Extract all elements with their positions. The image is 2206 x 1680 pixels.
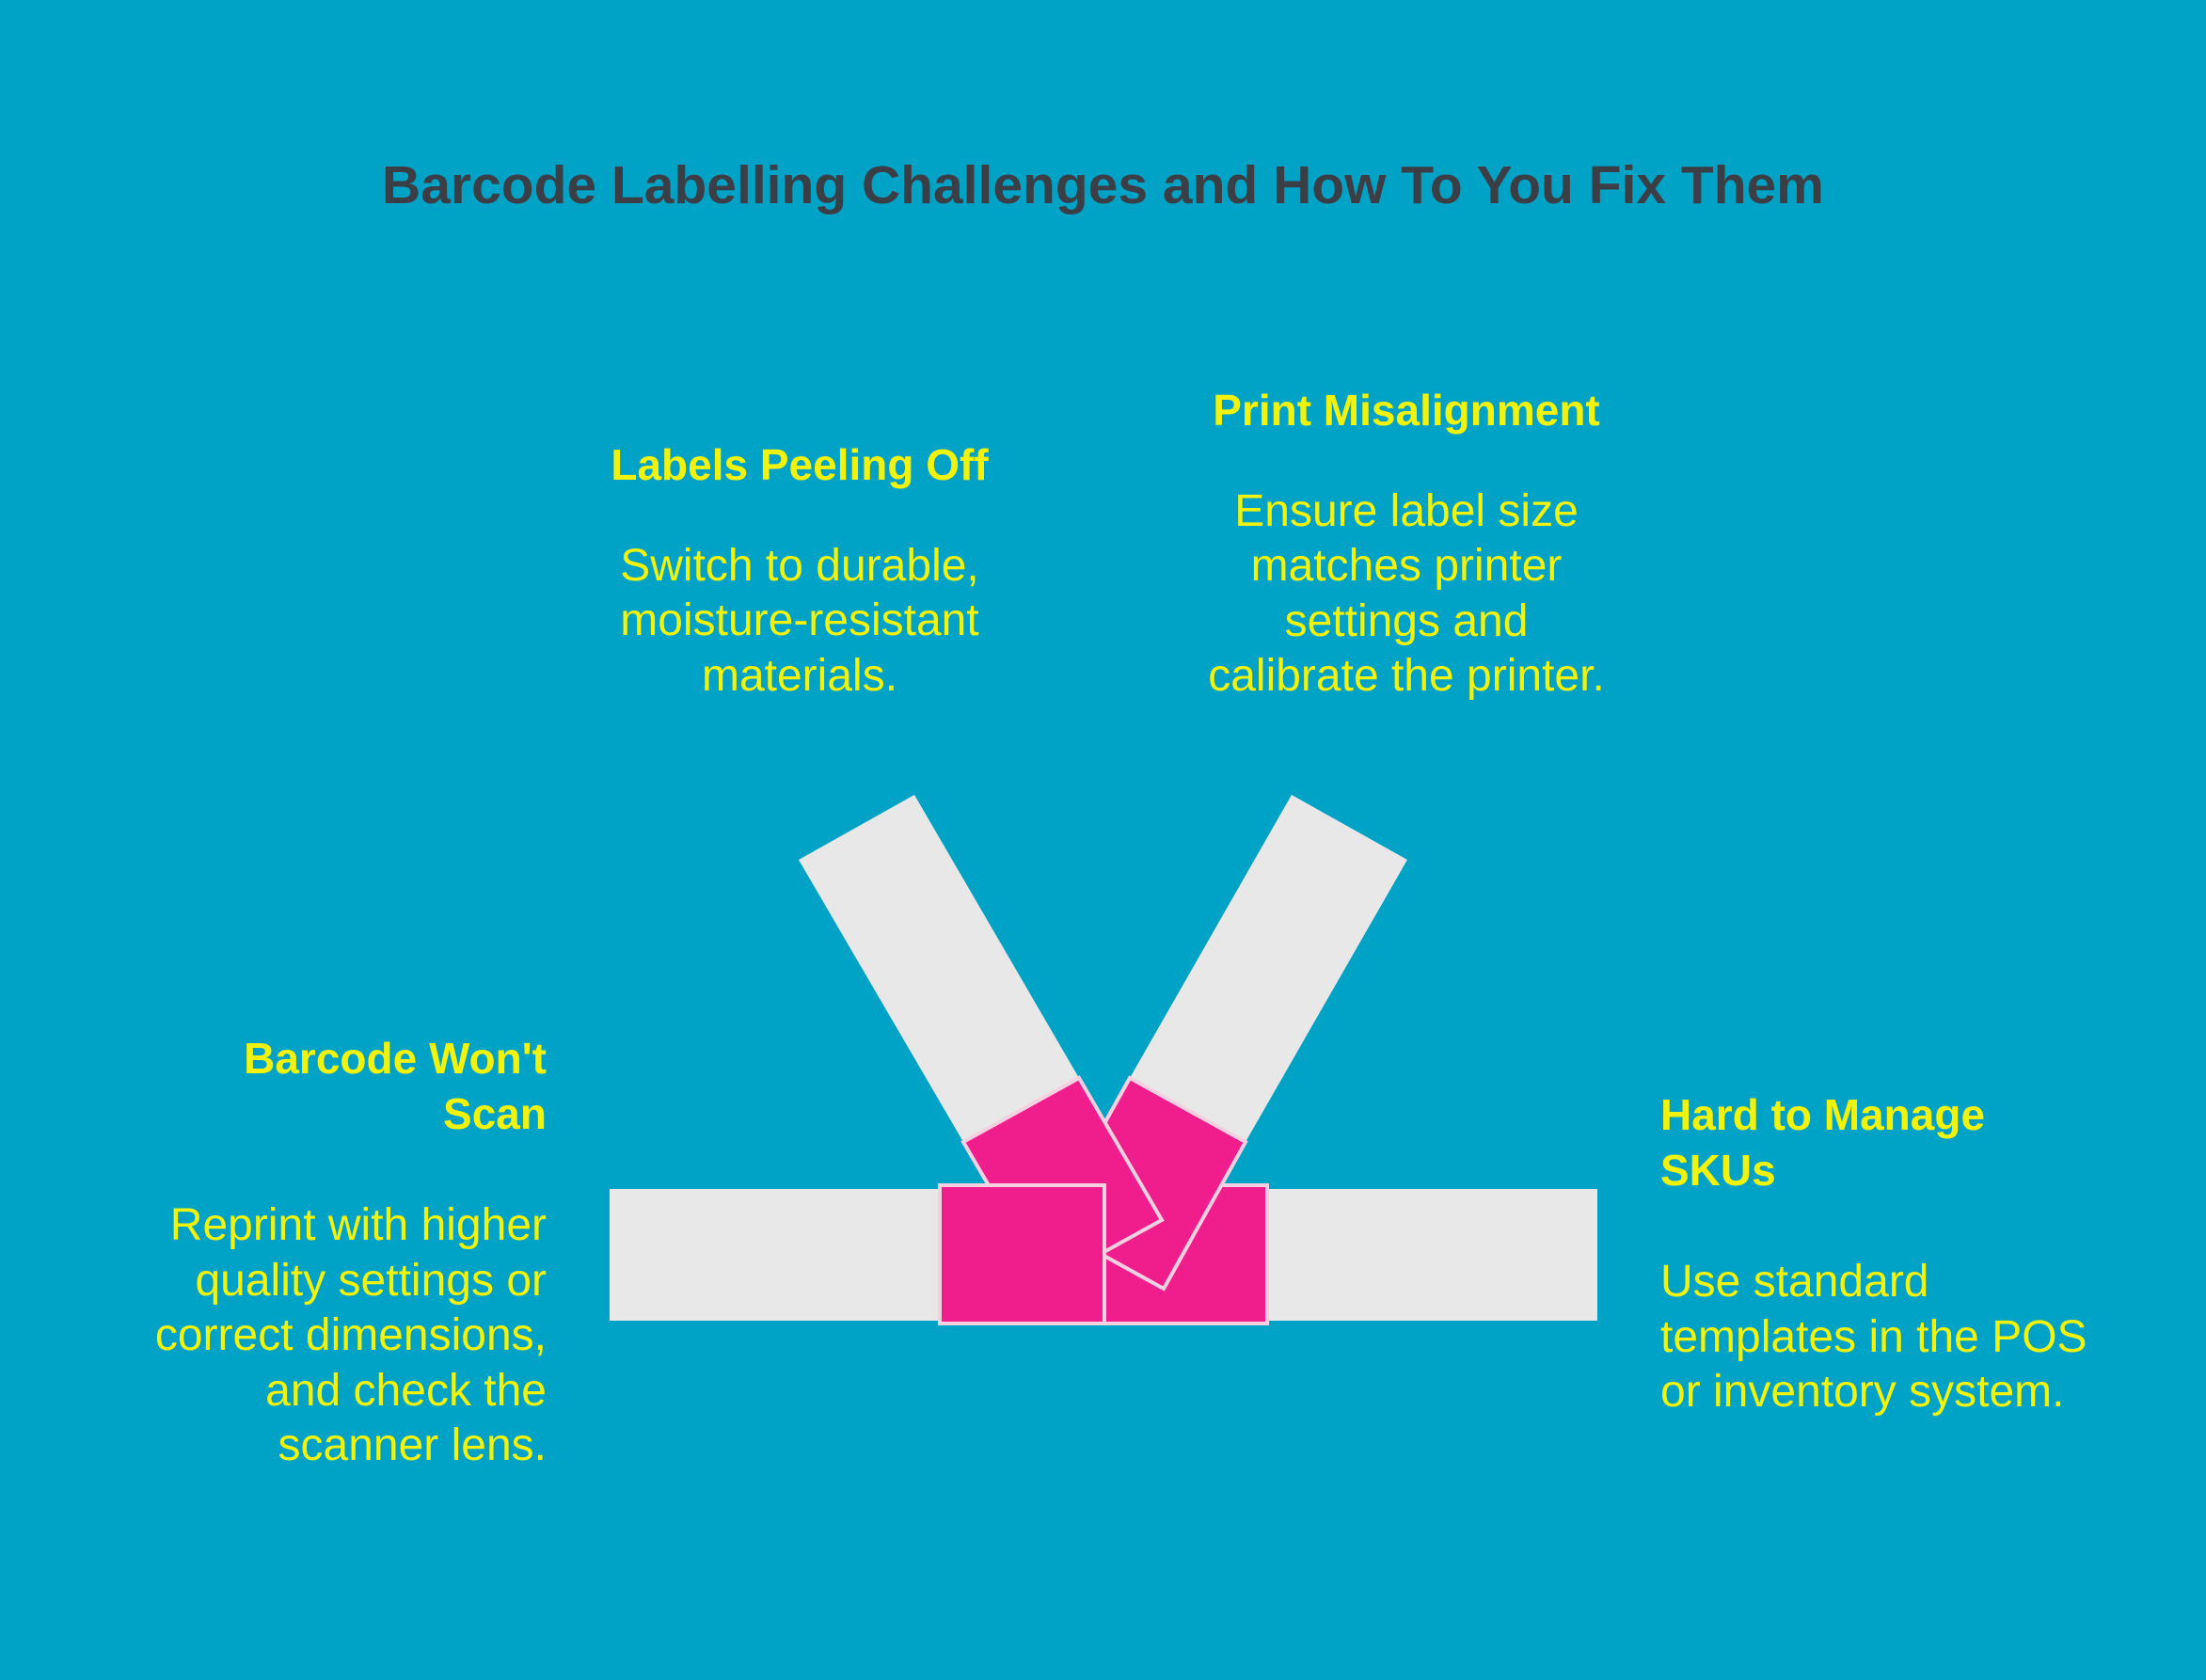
text: Barcode Won't Scan: Scan <box>443 1089 547 1138</box>
left pink joint <box>963 1078 1162 1284</box>
text: Barcode Won't Scan: Reprint with higher <box>170 1200 547 1250</box>
text: Labels Peeling Off: materials. <box>702 651 897 700</box>
right pink joint <box>1048 1078 1246 1289</box>
right diagonal bar <box>1130 795 1407 1142</box>
text: Labels Peeling Off: moisture-resistant <box>620 595 979 645</box>
text: Labels Peeling Off <box>611 440 989 700</box>
text: Print Misalignment: Ensure label size <box>1234 485 1579 536</box>
text: Barcode Won't Scan: Barcode Won't <box>244 1034 547 1083</box>
text: Hard to Manage SKUs <box>1660 1090 2087 1417</box>
text: Barcode Won't Scan <box>155 1034 547 1470</box>
text: Print Misalignment: Print Misalignment <box>1213 386 1600 435</box>
text: Labels Peeling Off: Switch to durable, <box>620 540 979 591</box>
text: Print Misalignment: calibrate the printer. <box>1208 651 1605 701</box>
text: Print Misalignment <box>1208 386 1605 701</box>
right pink square <box>1104 1185 1267 1323</box>
text: Print Misalignment: matches printer <box>1251 541 1562 591</box>
text: Labels Peeling Off: Labels Peeling Off <box>611 440 989 489</box>
right horizontal bar <box>1267 1189 1597 1321</box>
text: Hard to Manage SKUs: SKUs <box>1660 1146 1776 1195</box>
text: Barcode Won't Scan: correct dimensions, <box>155 1310 547 1360</box>
text: Hard to Manage SKUs: templates in the POS <box>1660 1311 2087 1362</box>
text: Barcode Won't Scan: and check the <box>265 1366 547 1415</box>
left pink square <box>940 1185 1104 1323</box>
left diagonal bar <box>799 795 1079 1142</box>
left horizontal bar <box>610 1189 940 1321</box>
text: Barcode Won't Scan: scanner lens. <box>278 1420 547 1470</box>
title: Barcode Labelling Challenges and How To You Fix Them <box>382 155 1824 215</box>
text: Hard to Manage SKUs: or inventory system. <box>1660 1367 2064 1417</box>
text: Barcode Won't Scan: quality settings or <box>195 1255 547 1306</box>
text: Hard to Manage SKUs: Hard to Manage <box>1660 1090 1985 1139</box>
text: Print Misalignment: settings and <box>1285 596 1528 645</box>
text: Hard to Manage SKUs: Use standard <box>1660 1257 1928 1307</box>
